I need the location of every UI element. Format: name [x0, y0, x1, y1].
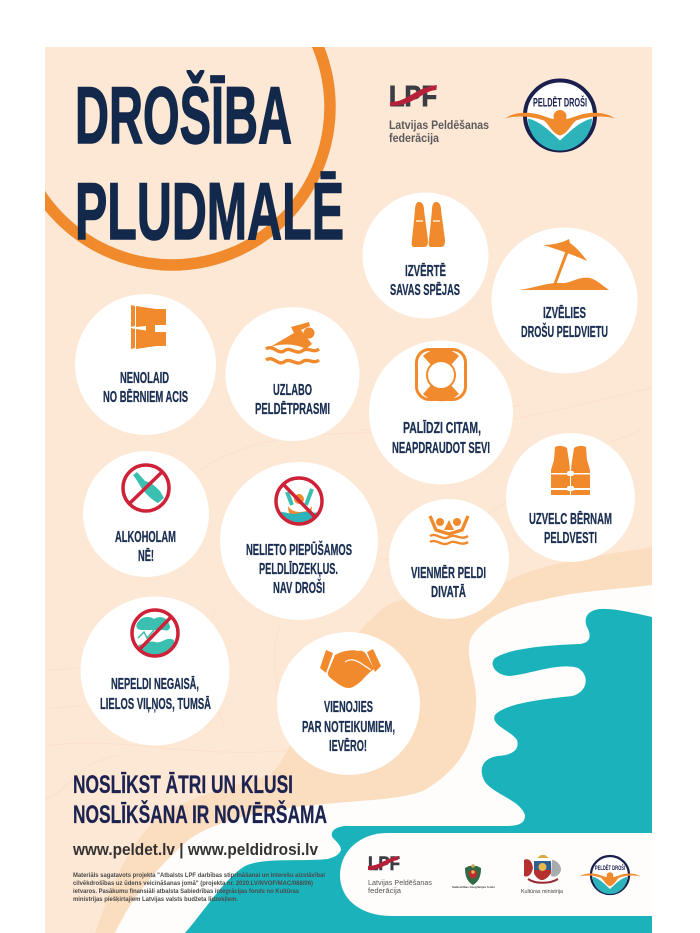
footer logo panel	[340, 833, 652, 916]
tip: no inflatables	[220, 462, 378, 620]
funding note	[73, 872, 325, 903]
slogan	[73, 771, 327, 829]
tip: no inflatables: NELIETO PIEPŪŠAMOS	[246, 541, 352, 559]
icon: beach umbrella	[519, 239, 609, 290]
tip: no alcohol	[83, 451, 209, 577]
title	[75, 70, 344, 257]
tip: swim in pairs: VIENMĒR PELDI	[411, 565, 486, 582]
tip: lifebuoy: PALĪDZI CITAM,	[403, 420, 481, 437]
tip: no inflatables: NAV DROŠI	[273, 579, 325, 597]
footer logo: LPF: federācija	[368, 886, 402, 895]
tip: umbrella	[492, 228, 638, 374]
icon: binoculars	[131, 305, 166, 349]
tip: umbrella: DROŠU PELDVIETU	[521, 323, 608, 341]
tip: agree on rules	[277, 632, 420, 775]
tip: agree on rules: PAR NOTEIKUMIEM,	[302, 719, 395, 736]
icon: handshake	[320, 649, 381, 688]
tip: umbrella: IZVĒLIES	[543, 305, 586, 322]
tip: binoculars	[75, 294, 216, 435]
footer logo: LPF	[368, 854, 432, 895]
tip: swimmer	[226, 307, 360, 441]
logo: Peldēt droši	[505, 80, 615, 150]
footer logo: Peldēt droši: PELDĒT DROŠI	[595, 864, 625, 872]
tip: no storm swimming: NEPELDI NEGAISĀ,	[111, 676, 199, 693]
funding note: ministrijas piešķirtajiem Latvijas valsts budžeta līdzekļiem.	[73, 896, 238, 903]
tip: life vest: UZVELC BĒRNAM	[529, 511, 612, 528]
logo: Latvijas Peldēšanas federācija	[389, 81, 489, 145]
footer logo: Sabiedrības integrācijas fonds: Sabiedrības integrācijas fonds	[452, 885, 495, 889]
orange circle	[45, 47, 336, 271]
tip: no storm swimming: LIELOS VIĻŅOS, TUMSĀ	[100, 696, 211, 713]
logo: Latvijas Peldēšanas federācija: Latvijas Peldēšanas	[389, 120, 489, 132]
funding note: cilvēkdrošības uz ūdens veicināšanas jomā" (projekta nr. 2020.LV/NVOF/MAC/088/06)	[73, 880, 313, 887]
icon: fins	[412, 202, 445, 247]
tip: lifebuoy: NEAPDRAUDOT SEVI	[392, 440, 490, 457]
icon: lifebuoy	[416, 349, 466, 401]
icon: no inflatables	[276, 478, 322, 524]
website links: www.peldet.lv | www.peldidrosi.lv	[72, 840, 318, 859]
logo: Latvijas Peldēšanas federācija: federācija	[389, 133, 440, 145]
logo: Peldēt droši: PELDĒT DROŠI	[533, 94, 587, 110]
tip: binoculars: NO BĒRNIEM ACIS	[103, 389, 188, 406]
footer logo: Sabiedrības integrācijas fonds	[452, 864, 495, 889]
tip: agree on rules: VIENOJIES	[324, 699, 373, 716]
tip: life vest	[506, 433, 635, 562]
icon: no alcohol	[123, 465, 169, 511]
footer logo: Peldēt droši	[579, 856, 641, 894]
tip: no inflatables: PELDLĪDZEKĻUS.	[259, 561, 338, 578]
footer logo: LPF: LPF	[368, 854, 400, 875]
icon: swimmer	[266, 322, 319, 363]
tip: no alcohol: NĒ!	[138, 548, 154, 565]
footer logo: Kultūras ministrija: Kultūras ministrija	[521, 889, 563, 895]
tip: swimmer: UZLABO	[273, 382, 312, 399]
funding note: Materiāls sagatavots projekta "Atbalsts LPF darbības stiprināšanai un interešu aizstāvībai	[73, 872, 325, 879]
logo: Latvijas Peldēšanas federācija: LPF	[389, 81, 437, 113]
icon: two swimmers	[430, 516, 468, 544]
slogan: NOSLĪKST ĀTRI UN KLUSI	[73, 771, 293, 799]
tip: fins: IZVĒRTĒ	[405, 263, 446, 280]
tip: swimmer: PELDĒTPRASMI	[255, 401, 330, 418]
footer logo: Kultūras ministrija	[521, 855, 563, 895]
icon: life vest	[549, 446, 592, 495]
tip: swim in pairs	[389, 499, 509, 619]
title: DROŠĪBA	[75, 70, 292, 161]
funding note: ietvaros. Pasākumu finansiāli atbalsta Sabiedrības integrācijas fonds no Kultūras	[73, 888, 299, 895]
tip: agree on rules: IEVĒRO!	[329, 738, 367, 755]
tip: fins	[362, 192, 488, 318]
title: PLUDMALĒ	[75, 167, 344, 257]
tip: fins: SAVAS SPĒJAS	[390, 282, 460, 299]
footer logo: LPF: Latvijas Peldēšanas	[368, 878, 432, 887]
sand shape	[95, 547, 652, 933]
slogan: NOSLĪKŠANA IR NOVĒRŠAMA	[73, 799, 327, 829]
tip: no alcohol: ALKOHOLAM	[115, 529, 176, 546]
tip: lifebuoy	[369, 340, 513, 484]
tip: life vest: PELDVESTI	[544, 530, 597, 547]
white shore	[115, 585, 652, 933]
tip: no storm swimming	[80, 596, 230, 746]
icon: no storm	[132, 610, 178, 656]
teal water	[185, 609, 652, 933]
tip: swim in pairs: DIVATĀ	[431, 584, 466, 601]
tip: binoculars: NENOLAID	[120, 370, 169, 387]
